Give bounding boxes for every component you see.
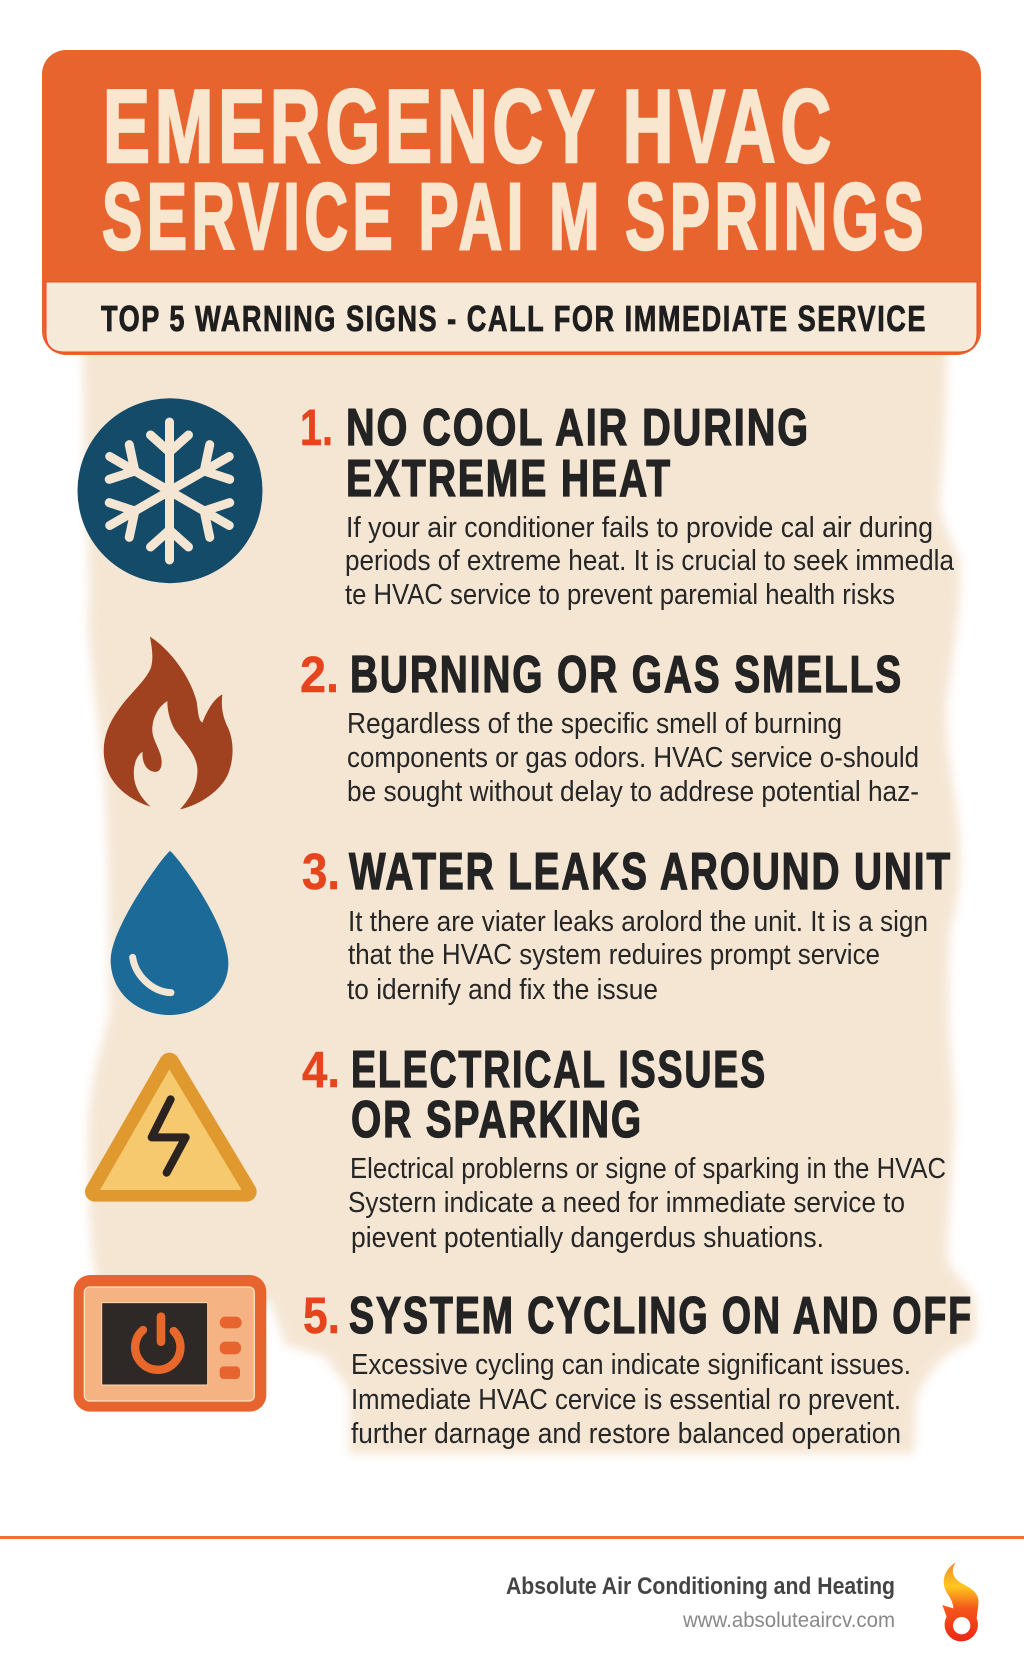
icon: flame [104,637,233,809]
sign 1 body [345,512,955,611]
title [102,69,928,270]
sign 1 heading [346,399,810,508]
sign 2 body: components or gas odors. HVAC service o-should [347,742,919,774]
icon: snowflake [78,398,262,583]
sign 4 heading [351,1041,767,1149]
sign 4 body: pievent potentially dangerdus shuations. [351,1222,824,1254]
sign 4 body: Systern indicate a need for immediate service to [348,1187,905,1219]
header background [42,50,981,355]
sign 4 heading: OR SPARKING [351,1091,643,1149]
sign 1 [300,399,955,611]
sign 3 body [347,906,928,1006]
sign 5 body: Excessive cycling can indicate significant issues. [351,1349,911,1381]
sign 5 [303,1287,973,1450]
sign 2 body: Regardless of the specific smell of burning [347,708,842,740]
sign 5 number: 5. [303,1287,340,1344]
sign 5 body: Immediate HVAC cervice is essential ro prevent. [351,1384,901,1416]
sign 4 heading: ELECTRICAL ISSUES [351,1041,767,1099]
sign 3 body: to idernify and fix the issue [347,974,658,1006]
sign 3 body: that the HVAC system reduires prompt service [348,939,880,971]
footer rule [0,1536,1024,1539]
sign 2 [300,646,919,808]
sign 4 [302,1041,946,1254]
sign 1 heading: EXTREME HEAT [346,450,672,508]
icon: thermostat power panel [74,1275,266,1412]
sign 1 heading: NO COOL AIR DURING [346,399,810,457]
sign 3 body: It there are viater leaks arolord the unit. It is a sign [348,906,928,938]
sign 5 body [351,1349,911,1450]
company name: Absolute Air Conditioning and Heating [506,1573,895,1600]
cream background panel [82,345,977,1454]
sign 1 body: te HVAC service to prevent paremial health risks [345,579,895,611]
icon: company flame logo [942,1562,979,1641]
icon: warning triangle [95,1063,247,1192]
sign 2 body [347,708,919,808]
sign 1 number: 1. [300,399,333,456]
website: www.absoluteaircv.com [682,1609,895,1632]
sign 2 body: be sought without delay to addrese potential haz- [347,776,919,808]
sign 1 body: If your air conditioner fails to provide cal air during [346,512,933,544]
sign 4 number: 4. [302,1041,340,1098]
sign 5 body: further darnage and restore balanced operation [351,1418,901,1450]
icon: water drop [111,851,228,1015]
sign 3 [302,843,952,1006]
footer [0,1536,1024,1641]
sign 4 body [348,1153,946,1254]
header banner [42,50,981,355]
sign 4 body: Electrical problerns or signe of sparking in the HVAC [350,1153,946,1185]
sign 1 body: periods of extreme heat. It is crucial to seek immedla [345,545,955,577]
subtitle strip [46,282,977,352]
sign 2 number: 2. [300,646,339,703]
sign 3 number: 3. [302,843,340,900]
